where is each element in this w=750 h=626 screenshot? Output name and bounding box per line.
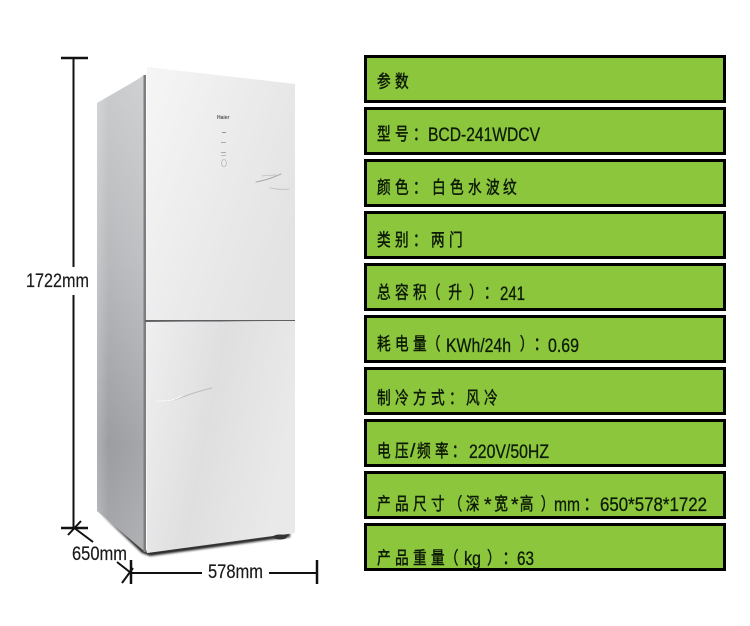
spec row: power consumption xyxy=(366,316,724,362)
spec row: dimensions: mm xyxy=(554,494,580,516)
spec row: dimensions: 产品尺寸（深 xyxy=(377,494,480,514)
spec row: weight xyxy=(366,524,724,570)
spec row: weight: 产品重量（ xyxy=(377,548,459,568)
width dimension line xyxy=(131,560,317,584)
spec row: cooling method xyxy=(366,368,724,414)
water ripple pattern xyxy=(157,174,289,401)
spec row: type xyxy=(366,212,724,258)
floor shadow xyxy=(100,513,290,556)
spec row: weight: ）： xyxy=(487,550,516,568)
spec row: power consumption: KWh/24h xyxy=(446,335,511,357)
spec row: dimensions: 650*578*1722 xyxy=(600,494,707,516)
spec row: dimensions xyxy=(366,472,724,518)
spec row: capacity: 241 xyxy=(500,283,525,305)
spec row: voltage: / xyxy=(410,440,416,462)
spec row: capacity: 总容积（升）： xyxy=(377,283,498,303)
spec row: model xyxy=(366,108,724,154)
spec row: voltage: 220V/50HZ xyxy=(469,441,549,463)
spec row: model: BCD-241WDCV xyxy=(428,124,540,146)
spec row: dimensions: 宽 xyxy=(494,494,508,514)
spec row: voltage xyxy=(366,420,724,466)
spec row: dimensions: ： xyxy=(584,496,597,514)
spec row: power consumption: ）： xyxy=(520,336,547,354)
lower door xyxy=(146,321,295,553)
spec row: cooling method: 制冷方式：风冷 xyxy=(377,388,498,408)
spec row: power consumption: 耗电量（ xyxy=(377,334,441,354)
depth dimension line xyxy=(68,521,133,583)
spec row: dimensions: 高） xyxy=(520,494,554,514)
brand mark and control panel xyxy=(217,115,230,166)
spec row: weight: 63 xyxy=(517,548,534,570)
foot xyxy=(273,534,287,540)
spec row: power consumption: 0.69 xyxy=(548,335,579,357)
spec row: colour xyxy=(366,160,724,206)
brand mark and control panel: Haier xyxy=(217,115,230,121)
height label: 1722mm xyxy=(26,271,89,292)
spec row: weight: kg xyxy=(464,548,481,570)
upper door xyxy=(146,67,295,320)
spec row: 参数: 参数 xyxy=(377,72,409,92)
spec row: 参数 xyxy=(366,56,724,102)
door seam xyxy=(145,320,295,322)
spec row: dimensions: * xyxy=(484,494,492,516)
refrigerator xyxy=(97,67,295,556)
width label: 578mm xyxy=(208,562,263,583)
spec row: colour: 颜色：白色水波纹 xyxy=(377,178,517,198)
spec row: voltage: 频率： xyxy=(417,441,466,461)
spec row: capacity xyxy=(366,264,724,310)
spec row: model: 型号： xyxy=(377,124,427,144)
height dimension line xyxy=(61,58,88,528)
spec row: voltage: 电压 xyxy=(377,441,409,461)
depth label: 650mm xyxy=(72,544,127,565)
refrigerator side panel xyxy=(97,75,144,551)
spec row: type: 类别：两门 xyxy=(377,230,463,250)
spec row: dimensions: * xyxy=(511,494,519,516)
